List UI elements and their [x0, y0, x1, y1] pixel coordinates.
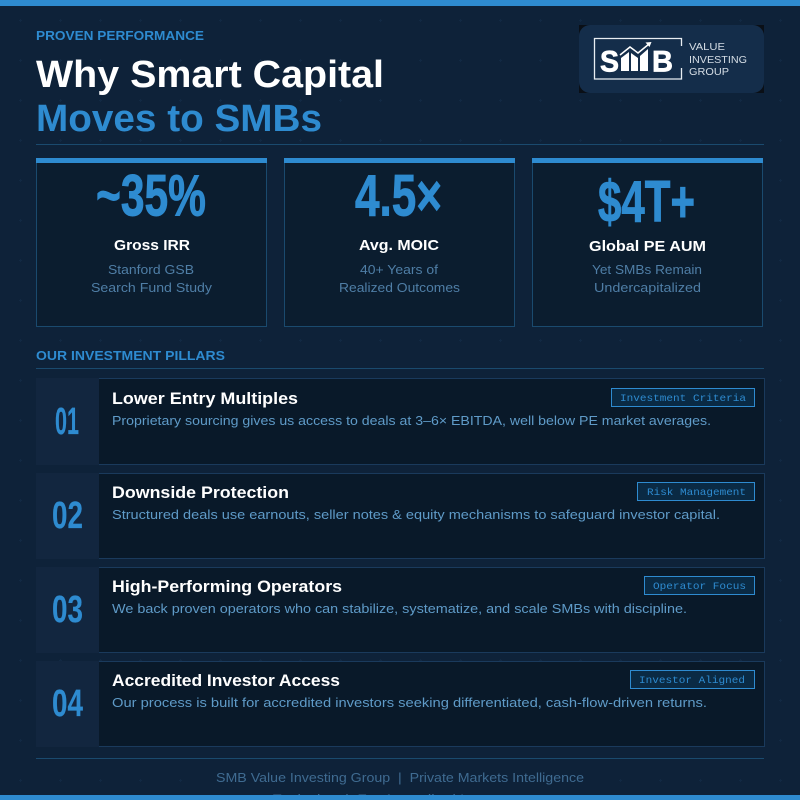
heading: our investment pillars: OUR INVESTMENT PILLARS [36, 348, 225, 363]
pillar 02: Structured deals use earnouts, seller notes & equity mechanisms to safeguard investor capital. [112, 507, 720, 522]
pillar 02 [36, 473, 764, 559]
panel: stat global PE AUM: Undercapitalized [594, 280, 701, 295]
pillar 03 [36, 567, 764, 653]
pillar 02: Risk Management [647, 487, 746, 499]
pillar 02: Downside Protection [112, 483, 289, 502]
logo: SMB Value Investing Group: INVESTING [689, 54, 747, 66]
pillar 01 [36, 378, 764, 465]
pillar 04: Our process is built for accredited investors seeking differentiated, cash-flow-driven returns. [112, 695, 707, 710]
pillar 01: 01 [55, 401, 79, 443]
panel: stat average MOIC: Realized Outcomes [339, 280, 461, 295]
panel: stat average MOIC: Avg. MOIC [359, 237, 439, 254]
logo: SMB Value Investing Group: VALUE [689, 41, 725, 53]
panel: stat average MOIC [284, 158, 515, 326]
footer text: SMB Value Investing Group | Private Markets Intelligence [216, 770, 584, 785]
top accent bar [0, 0, 800, 6]
pillar 03: 03 [52, 589, 83, 631]
panel: stat gross IRR [36, 158, 267, 326]
panel: stat global PE AUM: Yet SMBs Remain [592, 262, 702, 277]
eyebrow: proven performance: PROVEN PERFORMANCE [36, 28, 204, 43]
pillar 04: Accredited Investor Access [112, 671, 340, 690]
title: Moves to SMBs [36, 98, 322, 140]
panel: stat gross IRR: Stanford GSB [108, 262, 194, 277]
title: Why Smart Capital [36, 54, 384, 96]
footer text [216, 772, 584, 795]
pillar 03: High-Performing Operators [112, 577, 342, 596]
pillar 04: Investor Aligned [639, 675, 745, 687]
logo: SMB Value Investing Group: B [652, 46, 673, 78]
panel: stat average MOIC: 4.5× [355, 164, 442, 228]
bottom accent bar [0, 795, 800, 800]
pillar 01: Proprietary sourcing gives us access to deals at 3–6× EBITDA, well below PE market averages. [112, 413, 711, 428]
panel: stat gross IRR: ~35% [96, 164, 206, 228]
pillar 04: 04 [52, 683, 83, 725]
panel: stat average MOIC: 40+ Years of [360, 262, 438, 277]
pillar 02: 02 [52, 495, 83, 537]
title [36, 54, 384, 140]
pillar 03: We back proven operators who can stabilize, systematize, and scale SMBs with discipline. [112, 601, 687, 616]
panel: stat global PE AUM: Global PE AUM [589, 238, 706, 255]
panel: stat global PE AUM [532, 158, 763, 326]
logo: SMB Value Investing Group [579, 25, 764, 93]
panel: stat gross IRR: Gross IRR [114, 237, 190, 254]
panel: stat global PE AUM: $4T+ [598, 170, 695, 234]
logo: SMB Value Investing Group: GROUP [689, 66, 729, 78]
pillar 03: Operator Focus [653, 581, 746, 593]
panel: stat gross IRR: Search Fund Study [91, 280, 213, 295]
pillar 01: Lower Entry Multiples [112, 389, 298, 408]
pillar 04 [36, 661, 764, 747]
pillar 01: Investment Criteria [620, 393, 746, 405]
logo: SMB Value Investing Group: S [600, 46, 619, 78]
